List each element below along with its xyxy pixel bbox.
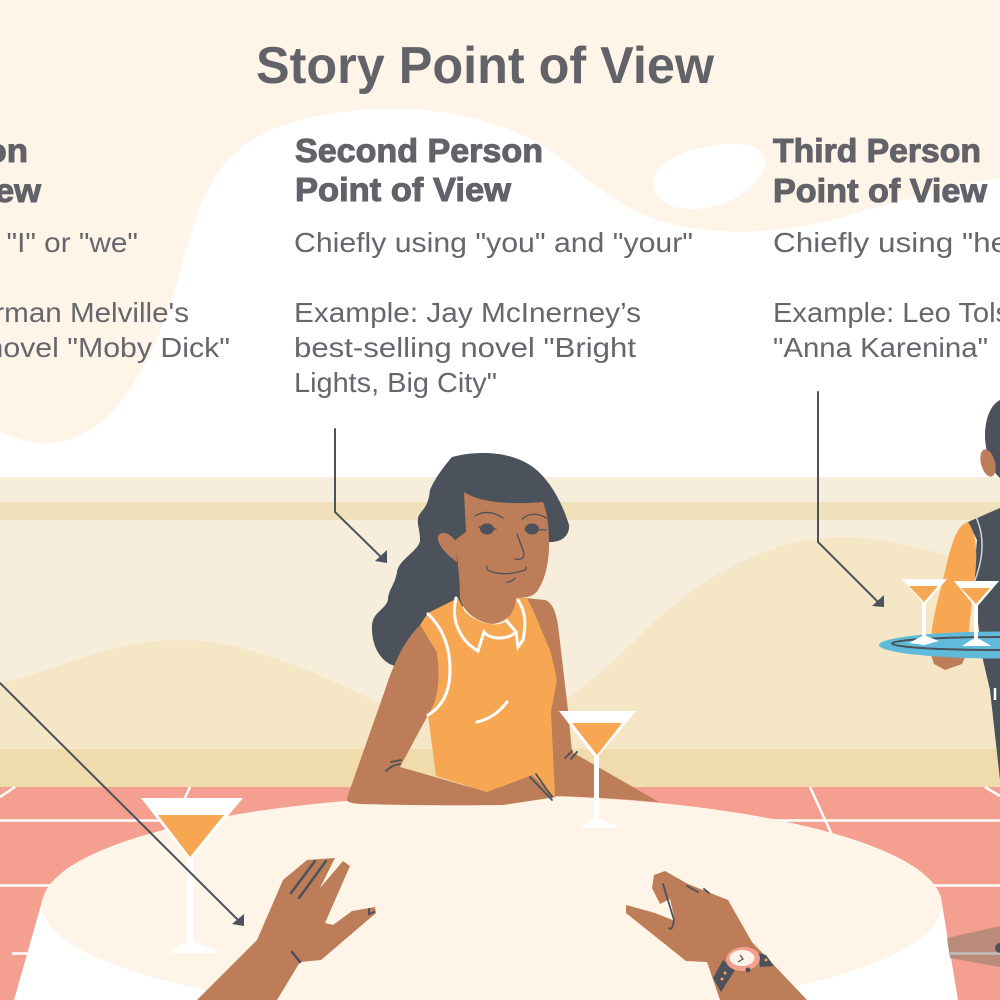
table: [14, 795, 958, 1000]
arrow: first person: [0, 683, 244, 926]
tray glass one: [902, 579, 947, 645]
ear: [438, 533, 457, 562]
column: second person: best-selling novel "Bright: [294, 332, 636, 363]
waiter sleeve: [931, 522, 976, 640]
column: first person: [0, 132, 230, 363]
column: third person: Third Person: [773, 132, 981, 169]
column: second person: Example: Jay McInerney’s: [294, 297, 641, 328]
title: Story Point of View: [256, 37, 715, 95]
far arm: [525, 598, 659, 802]
waiter vest trim: [973, 515, 982, 585]
floor: [0, 787, 1000, 1000]
hair: [372, 453, 569, 666]
blouse trim: [428, 598, 525, 722]
column: second person: Second Person: [295, 132, 543, 169]
martini glass: woman: [559, 711, 636, 828]
arrow: second person: [335, 429, 387, 563]
watch: [713, 946, 774, 992]
column: second person: Chiefly using "you" and "your": [294, 227, 693, 258]
woman: [347, 453, 659, 805]
facial lines: [475, 512, 546, 582]
left hand: [197, 858, 376, 1000]
column: third person: Point of View: [773, 172, 987, 209]
column: third person: [773, 132, 1000, 363]
neck and face: [455, 492, 549, 624]
arrow: third person: [818, 392, 884, 607]
arm creases: [386, 751, 577, 800]
waiter hand: [931, 655, 966, 670]
column: second person: [294, 132, 693, 398]
martini glass: foreground: [141, 798, 243, 953]
blouse: [420, 598, 557, 797]
near arm: [347, 625, 556, 805]
right hand: [626, 871, 807, 1000]
column: third person: "Anna Karenina": [773, 332, 988, 363]
tray: [879, 632, 1000, 658]
tray glass two: [954, 581, 999, 646]
waiter ear: [978, 448, 998, 478]
background: cream blob: [0, 0, 1000, 443]
table edge shadow: [947, 926, 1000, 967]
column: second person: Lights, Big City": [294, 367, 497, 398]
waiter: [879, 400, 1000, 780]
background: wall: [0, 477, 1000, 787]
waiter head: [985, 400, 1000, 478]
column: second person: Point of View: [295, 171, 511, 208]
waiter vest and trousers: [968, 508, 1000, 780]
eyes: [480, 524, 494, 534]
